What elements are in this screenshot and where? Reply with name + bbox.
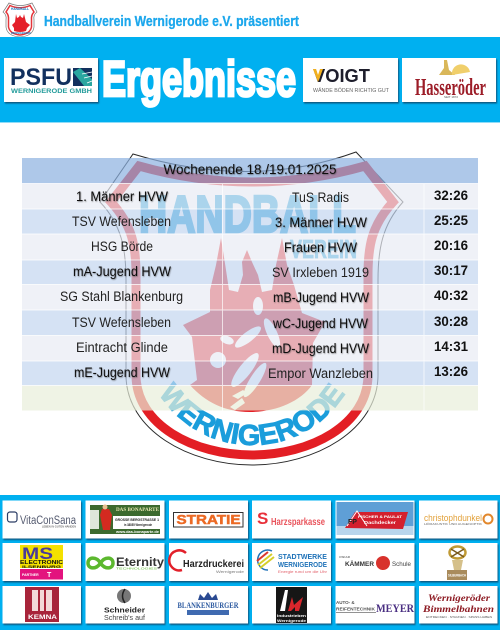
sponsor: MS Electronic [2, 543, 81, 581]
logo: PSFU: WERNIGERODE GMBH [11, 88, 92, 95]
logo: Hasseröder: SEIT 1872 [444, 95, 458, 99]
sponsor: Kemna [2, 586, 81, 624]
watermark crest [100, 151, 404, 466]
sponsor: Schneider: Schneider [104, 606, 145, 614]
row 8: Empor Wanzleben [268, 366, 373, 381]
row 6: TSV Wefensleben [72, 315, 171, 330]
results table [22, 158, 478, 411]
row 7: Eintracht Glinde [76, 340, 168, 355]
sponsor: Eternity: Eternity [116, 555, 164, 569]
row 7 [76, 339, 468, 356]
row 5: SG Stahl Blankenburg [60, 289, 183, 304]
row 3: 20:16 [434, 238, 468, 253]
logo: Voigt: WÄNDE BÖDEN RICHTIG GUT [313, 87, 390, 94]
row 6: 30:28 [434, 314, 468, 329]
sponsor: MS Electronic: T [47, 572, 52, 579]
header line: Handballverein Wernigerode e.V. präsentiert [44, 14, 299, 30]
sponsor: Schneider: Schreib's auf [104, 613, 146, 622]
club crest small [3, 3, 37, 37]
table row backgrounds [22, 183, 478, 411]
sponsor: Wernigeröder Bimmelbahnen [419, 586, 498, 624]
row 8 [74, 364, 468, 381]
sponsor: Meyer [336, 586, 414, 624]
row 6: wC-Jugend HVW [272, 316, 368, 331]
sponsor: VitaConSana: LEBEN IN GUTEN HÄNDEN [42, 524, 76, 528]
table header [22, 158, 478, 184]
sponsor: Wernigeröder Bimmelbahnen: Wernigeröder [428, 594, 490, 604]
sponsor: Harzdruckerei: Wernigerode [216, 569, 245, 574]
sponsor: Das Bonaparte: in 38855 Wernigerode [124, 523, 152, 527]
club crest small: HANDBALL [11, 6, 29, 11]
sponsor: Meyer: AUTO- & [336, 600, 355, 605]
sponsor: Kämmer Schule: Schule [392, 561, 411, 568]
row 4: 30:17 [434, 263, 468, 278]
row 7: 14:31 [434, 339, 468, 354]
sponsor: Christoph Dunkel [419, 500, 498, 538]
sponsor: MS Electronic: ILSENBURG [22, 565, 62, 569]
table header: Wochenende 18./19.01.2025 [164, 161, 337, 177]
sponsor: Stadtwerke Wernigerode: Energie rund um die Uhr [278, 570, 328, 574]
sponsor: Meyer: MEYER [376, 601, 414, 615]
sponsor: Eternity [86, 543, 164, 581]
sponsor: Harzdruckerei [169, 543, 248, 581]
title band [0, 37, 500, 123]
row 3: Frauen HVW [284, 240, 357, 255]
crest castle silhouette [183, 238, 325, 412]
logo: Voigt: VOIGT [313, 66, 370, 86]
row 1 [76, 188, 468, 205]
sponsor: Fischer und Paulat Dachdecker: Dachdecker [364, 520, 396, 525]
sponsor: Das Bonaparte: DAS BONAPARTE [116, 508, 160, 513]
logo: PSFU: PSFU [10, 64, 72, 91]
row 3 [91, 238, 468, 255]
sponsor: MS Electronic: PARTNER [22, 573, 39, 577]
row 4: SV Irxleben 1919 [272, 265, 369, 280]
sponsor: Fischer und Paulat Dachdecker: FP [348, 519, 357, 526]
crest text VEREIN: VEREIN [290, 234, 357, 264]
row 8: mE-Jugend HVW [74, 365, 170, 380]
sponsor: Silberbach: SILBERBACH [448, 574, 466, 578]
sponsor: Harzsparkasse: S [257, 509, 268, 528]
sponsor: Kämmer Schule: KÄMMER [345, 560, 374, 568]
sponsor: Eternity: TECHNOLOGIES [116, 566, 157, 570]
sponsor: Industrie W [252, 586, 331, 624]
sponsor: Harzsparkasse: Harzsparkasse [271, 517, 325, 528]
sponsor: Das Bonaparte [86, 500, 164, 538]
sponsor: Industrie W: Wernigerode [277, 619, 306, 623]
sponsor: Fischer und Paulat Dachdecker: FISCHER & PAULAT [358, 514, 403, 519]
sponsor: Christoph Dunkel: christophdunkel [424, 513, 482, 523]
row 2: 25:25 [434, 213, 468, 228]
club crest small: WERNIGERODE [11, 31, 31, 35]
row 5 [60, 288, 468, 305]
sponsor: VitaConSana: VitaConSana [20, 515, 77, 527]
row 8: 13:26 [434, 364, 468, 379]
crest text WERNIGERODE [142, 335, 362, 445]
sponsor: Schneider [86, 586, 164, 624]
row 6 [72, 314, 468, 331]
row 1: 1. Männer HVW [76, 189, 168, 204]
sponsor: MS Electronic: MS [22, 544, 53, 563]
sponsor: Blankenburger: BLANKENBURGER [178, 600, 239, 610]
sponsor: Das Bonaparte: GROSSE BERGSTRASSE 1 [115, 518, 159, 522]
sponsor band [0, 495, 500, 630]
title Ergebnisse: Ergebnisse [102, 51, 296, 107]
sponsor: Fischer und Paulat Dachdecker [336, 500, 414, 538]
sponsor: VitaConSana [2, 500, 81, 538]
sponsor: MS Electronic: ELECTRONIC [20, 560, 64, 566]
row 2 [72, 213, 468, 230]
row 5: 40:32 [434, 288, 468, 303]
sponsor: Industrie W: Industrieben [277, 614, 306, 618]
row 1: 32:26 [434, 188, 468, 203]
crest handball player [210, 297, 283, 410]
logo: Voigt [303, 58, 398, 102]
row 4: mA-Jugend HVW [73, 264, 171, 279]
sponsor: Meyer: REIFENTECHNIK [336, 606, 376, 612]
crest text HANDBALL: HANDBALL [139, 186, 356, 244]
sponsor: Stratie: STRATIE [176, 512, 241, 527]
sponsor: Stadtwerke Wernigerode: WERNIGERODE [278, 562, 327, 569]
sponsor: Harzdruckerei: Harzdruckerei [183, 559, 244, 570]
sponsor: Stadtwerke Wernigerode [252, 543, 331, 581]
row 5: mB-Jugend HVW [273, 290, 369, 305]
row 2: TSV Wefensleben [72, 214, 171, 229]
sponsor: Das Bonaparte: www.das-bonaparte.de [115, 530, 159, 534]
row 3: HSG Börde [91, 239, 153, 254]
row 2: 3. Männer HVW [275, 215, 367, 230]
watermark crest: WERNIGERODE [160, 380, 346, 446]
logo: Hasseröder [402, 58, 496, 102]
row 4 [73, 263, 468, 280]
sponsor: Wernigeröder Bimmelbahnen: ENTDECKEN · STAUNEN · SPASS HABEN [426, 615, 492, 619]
row 1: TuS Radis [292, 190, 349, 205]
sponsor: Blankenburger [169, 586, 248, 624]
sponsor: Christoph Dunkel: HÖRAKUSTIK UND AUGENOPTIK [424, 522, 482, 526]
sponsor: Stadtwerke Wernigerode: STADTWERKE [278, 554, 327, 561]
logo: PSFU [4, 58, 98, 102]
sponsor: Silberbach [419, 543, 498, 581]
sponsor: Kämmer Schule [336, 543, 414, 581]
sponsor: Harzsparkasse [252, 500, 331, 538]
row 7: mD-Jugend HVW [272, 341, 369, 356]
sponsor: Wernigeröder Bimmelbahnen: Bimmelbahnen [422, 605, 494, 615]
sponsor: Kemna: KEMNA [28, 615, 58, 621]
sponsor: Kämmer Schule: OSKAR [339, 555, 351, 559]
sponsor: Stratie [169, 500, 248, 538]
